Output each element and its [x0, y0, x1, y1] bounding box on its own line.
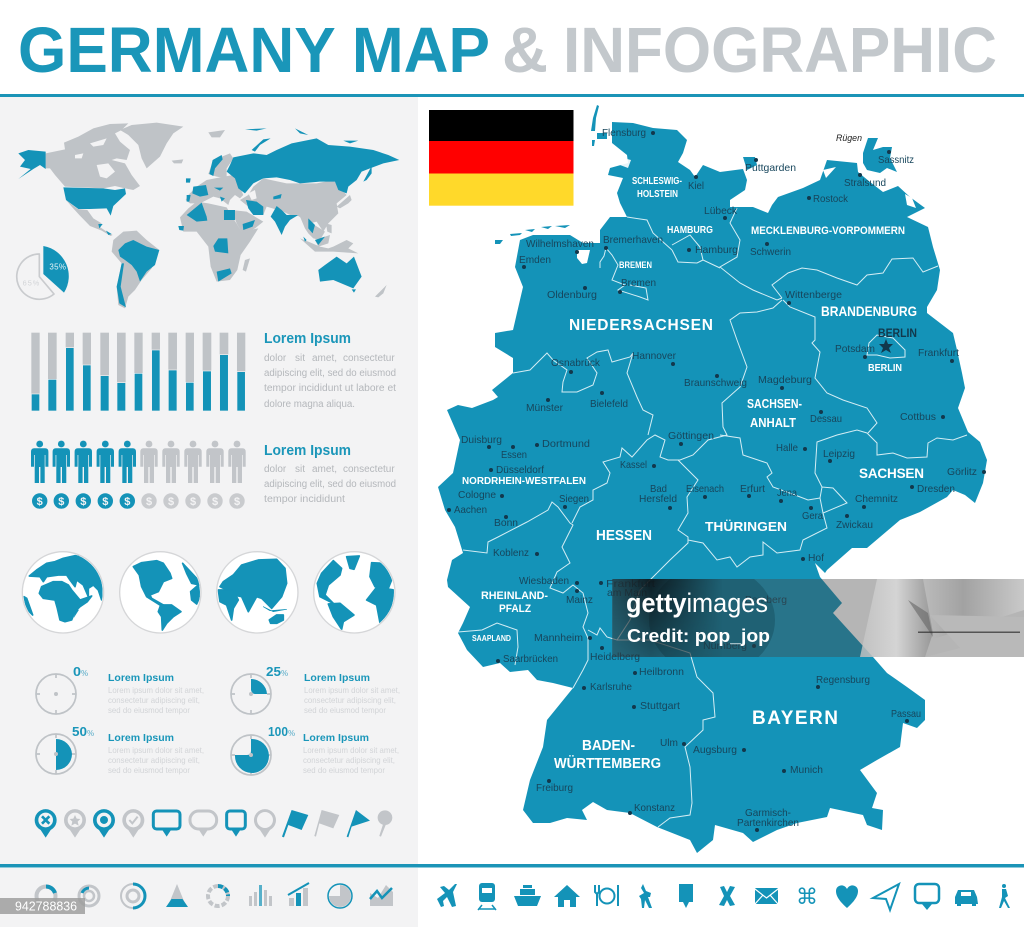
city names: Aachen	[454, 504, 487, 516]
city names: Dessau	[810, 413, 842, 425]
gauge: 0%: consectetur adipiscing elit,	[108, 695, 200, 705]
city names: Bamberg	[745, 594, 787, 606]
city names: Osnabrück	[551, 357, 601, 369]
globe: Americas	[120, 552, 201, 633]
state names: BREMEN	[619, 260, 652, 271]
icon: paper plane	[873, 884, 899, 910]
state names: NIEDERSACHSEN	[569, 317, 713, 334]
state names: PFALZ	[499, 603, 531, 615]
pie legend: 35% and 65%: 35%	[49, 262, 66, 271]
city names: Erfurt	[740, 483, 765, 495]
watermark band: Credit: pop_jop	[627, 626, 770, 646]
icon: dashed ring	[208, 886, 228, 906]
city names: Rügen	[836, 133, 862, 144]
city names: Braunschweig	[684, 377, 747, 389]
image id tag: 942788836	[15, 900, 77, 914]
city names: Konstanz	[634, 802, 675, 814]
gauge: 50%: consectetur adipiscing elit,	[108, 755, 200, 765]
city names: Bad	[650, 483, 667, 495]
map pins, speech bubbles and flags row	[35, 809, 392, 838]
city names: Flensburg	[602, 127, 646, 139]
city names: Kiel	[688, 180, 704, 192]
text block 1: sit	[295, 353, 305, 364]
gauge: 25%: sed do eiusmod tempor	[304, 705, 386, 715]
state names: HOLSTEIN	[637, 189, 678, 200]
city names: Freiburg	[536, 782, 573, 794]
icon: bar cluster	[249, 885, 272, 906]
icon: airplane	[437, 884, 457, 907]
state names: RHEINLAND-	[481, 590, 548, 602]
state names: THÜRINGEN	[705, 519, 787, 534]
city names: Sassnitz	[878, 154, 914, 166]
city names: Wilhelmshaven	[526, 238, 594, 250]
dollar coins row: $	[102, 496, 108, 508]
gauge: 100%: 100	[268, 724, 288, 739]
dollar coins row: $	[190, 496, 196, 508]
dollar coins row: $	[58, 496, 64, 508]
icon: capital star	[879, 339, 893, 353]
icon: donut chart	[36, 886, 56, 906]
globes row	[22, 552, 395, 633]
gauge: 50%: sed do eiusmod tempor	[108, 765, 190, 775]
text block 2	[264, 443, 396, 505]
city names: Siegen	[559, 493, 589, 505]
city names: Stralsund	[844, 177, 886, 189]
city names: Chemnitz	[855, 493, 898, 505]
icon: radial arcs	[121, 884, 145, 908]
city names: Münster	[526, 402, 563, 414]
city names: Zwickau	[836, 519, 873, 531]
city names: Dortmund	[542, 438, 590, 450]
city names: Oldenburg	[547, 289, 597, 301]
city names: Augsburg	[693, 744, 737, 756]
city names: Görlitz	[947, 466, 977, 478]
city names: Duisburg	[461, 434, 502, 446]
state names: SACHSEN	[859, 466, 924, 481]
gauge: 0%: Lorem Ipsum	[108, 672, 174, 684]
city names: Cologne	[458, 489, 496, 501]
text block 2: sit	[295, 464, 305, 475]
dollar coins row: $	[37, 496, 43, 508]
title: GERMANY MAP	[18, 14, 490, 86]
gauge: 0%: %	[81, 669, 88, 678]
city names: Passau	[891, 708, 921, 720]
gauge: 50%: Lorem ipsum dolor sit amet,	[108, 745, 204, 755]
icon: square pin	[679, 884, 693, 908]
state names: SAAPLAND	[472, 634, 511, 643]
gauge: 25%: 25	[266, 664, 281, 679]
coastal cut-outs	[577, 158, 916, 264]
text block 2: adipiscing elit, sed do eiusmod	[264, 479, 396, 490]
state names: BAYERN	[752, 708, 838, 729]
text block 1	[264, 331, 396, 410]
text block 1: Lorem Ipsum	[264, 331, 351, 347]
city names: Magdeburg	[758, 374, 812, 386]
gauge: 50%: Lorem Ipsum	[108, 732, 174, 744]
text block 1: amet,	[312, 353, 337, 364]
title: &	[502, 14, 548, 86]
text block 1: adipiscing elit, sed do eiusmod	[264, 368, 396, 379]
icon: heart	[836, 885, 858, 908]
globe: Asia	[217, 552, 298, 633]
dollar coins row: $	[80, 496, 86, 508]
city names: Kassel	[620, 459, 647, 471]
city names: Emden	[519, 254, 551, 266]
globe: Africa and Europe	[22, 552, 104, 633]
dollar coins row: $	[212, 496, 218, 508]
text block 2: consectetur	[343, 464, 395, 475]
icon: car	[955, 890, 978, 906]
gauge: 50%: %	[87, 729, 94, 738]
bottom left panel background	[0, 868, 418, 927]
icon: concentric circles	[79, 886, 99, 906]
city names: Bremerhaven	[603, 234, 663, 246]
city names: Bielefeld	[590, 398, 628, 410]
city names: Wiesbaden	[519, 575, 569, 587]
text block 2: amet,	[312, 464, 337, 475]
city dots	[447, 131, 986, 832]
city names: Halle	[776, 442, 798, 454]
left panel background	[0, 97, 418, 864]
gauge: 0%	[36, 664, 204, 715]
gauge: 25%: Lorem Ipsum	[304, 672, 370, 684]
city names: Essen	[501, 449, 527, 461]
state names: BRANDENBURG	[821, 303, 917, 319]
dollar coins row	[32, 493, 245, 509]
image id tag	[0, 898, 85, 914]
gauge: 100%: consectetur adipiscing elit,	[303, 755, 395, 765]
city names: Hannover	[632, 350, 676, 362]
map land mass	[438, 122, 987, 853]
gauge: 25%: %	[281, 669, 288, 678]
state names: NORDRHEIN-WESTFALEN	[462, 475, 586, 487]
icon: ship	[514, 885, 541, 906]
city names: am Main	[607, 587, 647, 599]
city names: Koblenz	[493, 547, 529, 559]
state names: BERLIN	[868, 363, 902, 374]
state names	[462, 176, 924, 772]
city names: Rostock	[813, 193, 849, 205]
gauge: 25%: Lorem ipsum dolor sit amet,	[304, 685, 400, 695]
city names: Gera	[802, 510, 823, 522]
state names: WÜRTTEMBERG	[554, 755, 661, 772]
city names: Hof	[808, 552, 824, 564]
city names: Leipzig	[823, 448, 855, 460]
city names: Nürnberg	[703, 640, 747, 652]
text block 1: dolor	[264, 353, 287, 364]
text block 2: dolor	[264, 464, 287, 475]
bottom travel icons	[437, 883, 1010, 910]
city names: Frankfurt	[606, 578, 655, 590]
gauge: 50%: 50	[72, 724, 87, 739]
pie legend: 35% and 65%	[17, 246, 69, 299]
gauge: 100%	[231, 724, 399, 775]
city names: Karlsruhe	[590, 681, 632, 693]
stacked bar chart	[31, 333, 245, 411]
city names: Frankfurt	[918, 347, 959, 359]
city names: Saarbrücken	[503, 653, 558, 665]
city names: Ulm	[660, 737, 678, 749]
city names: Lübeck	[704, 205, 738, 217]
icon: command symbol: ⌘	[796, 885, 818, 910]
city names: Mainz	[566, 594, 593, 606]
city names: Wittenberge	[785, 289, 842, 301]
icon: pyramid chart	[166, 884, 188, 907]
city names: BERLIN	[878, 326, 917, 340]
gauge: 50%	[36, 724, 204, 775]
icon: house	[554, 885, 580, 907]
gauge: 25%	[231, 664, 400, 715]
city names: Garmisch-	[745, 807, 791, 819]
state names: SACHSEN-	[747, 397, 802, 411]
icon: cross	[719, 886, 735, 906]
state names: BADEN-	[582, 738, 635, 754]
globe: Atlantic	[314, 552, 395, 633]
dollar coins row: $	[146, 496, 152, 508]
city names: Partenkirchen	[737, 817, 799, 829]
icon: pie clock	[328, 884, 352, 908]
city names: Regensburg	[816, 674, 870, 686]
watermark text: gettyimages	[626, 588, 768, 618]
icon: train	[478, 883, 496, 910]
state names: HAMBURG	[667, 224, 713, 236]
icon: speech bubble	[915, 884, 939, 910]
pie legend: 35% and 65%: 65%	[23, 278, 40, 287]
city names: Düsseldorf	[496, 464, 544, 476]
city names: Heidelberg	[590, 651, 640, 663]
city names: Hamburg	[695, 244, 738, 256]
text block 2: tempor incididunt	[264, 494, 345, 505]
dollar coins row: $	[234, 496, 240, 508]
gauge: 100%: Lorem Ipsum	[303, 732, 369, 744]
city names: Dresden	[917, 483, 955, 495]
Germany flag	[429, 110, 574, 206]
gauge: 100%: sed do eiusmod tempor	[303, 765, 385, 775]
world map with highlighted countries	[17, 123, 399, 308]
people pictogram row	[31, 441, 246, 483]
gauge: 0%: 0	[73, 664, 81, 679]
state names: MECKLENBURG-VORPOMMERN	[751, 225, 905, 237]
city names: Mannheim	[534, 632, 583, 644]
city names: Schwerin	[750, 246, 791, 258]
state names: SCHLESWIG-	[632, 176, 682, 187]
text block 1: dolore magna aliqua.	[264, 399, 355, 410]
gauge: 0%: sed do eiusmod tempor	[108, 705, 190, 715]
gauge: 0%: Lorem ipsum dolor sit amet,	[108, 685, 204, 695]
islands	[495, 105, 897, 244]
gauge: 100%: %	[288, 729, 295, 738]
dollar coins row: $	[124, 496, 130, 508]
city names: Jena	[777, 487, 797, 499]
city names: Bonn	[494, 517, 518, 529]
city names: Potsdam	[835, 343, 875, 355]
icon: fork, plate and knife	[595, 885, 618, 906]
city names: Hersfeld	[639, 493, 677, 505]
city names	[454, 127, 977, 829]
city names: Munich	[790, 764, 823, 776]
gauge: 25%: consectetur adipiscing elit,	[304, 695, 396, 705]
city names: Eisenach	[686, 483, 724, 495]
icon: deer	[639, 884, 652, 908]
title: INFOGRAPHIC	[563, 14, 997, 86]
city names: Bremen	[621, 277, 656, 289]
state names: HESSEN	[596, 527, 652, 544]
text block 1: consectetur	[343, 353, 395, 364]
Germany map	[438, 105, 987, 853]
text block 1: tempor incididunt ut labore et	[264, 383, 396, 394]
city names: Cottbus	[900, 411, 936, 423]
state borders	[458, 208, 967, 827]
city names: Puttgarden	[745, 162, 796, 174]
city names: Stuttgart	[640, 700, 680, 712]
gauge: 100%: Lorem ipsum dolor sit amet,	[303, 745, 399, 755]
text block 2: Lorem Ipsum	[264, 443, 351, 459]
city names: Heilbronn	[639, 666, 684, 678]
icon: walking person	[999, 884, 1010, 908]
title	[18, 14, 997, 86]
city names: Göttingen	[668, 430, 714, 442]
icon: growth bars	[288, 883, 309, 906]
watermark band	[612, 579, 1024, 657]
dollar coins row: $	[168, 496, 174, 508]
icon: envelope	[755, 888, 778, 904]
icon: area chart	[370, 885, 393, 906]
bottom chart icons	[36, 883, 393, 908]
state names: ANHALT	[750, 416, 796, 430]
